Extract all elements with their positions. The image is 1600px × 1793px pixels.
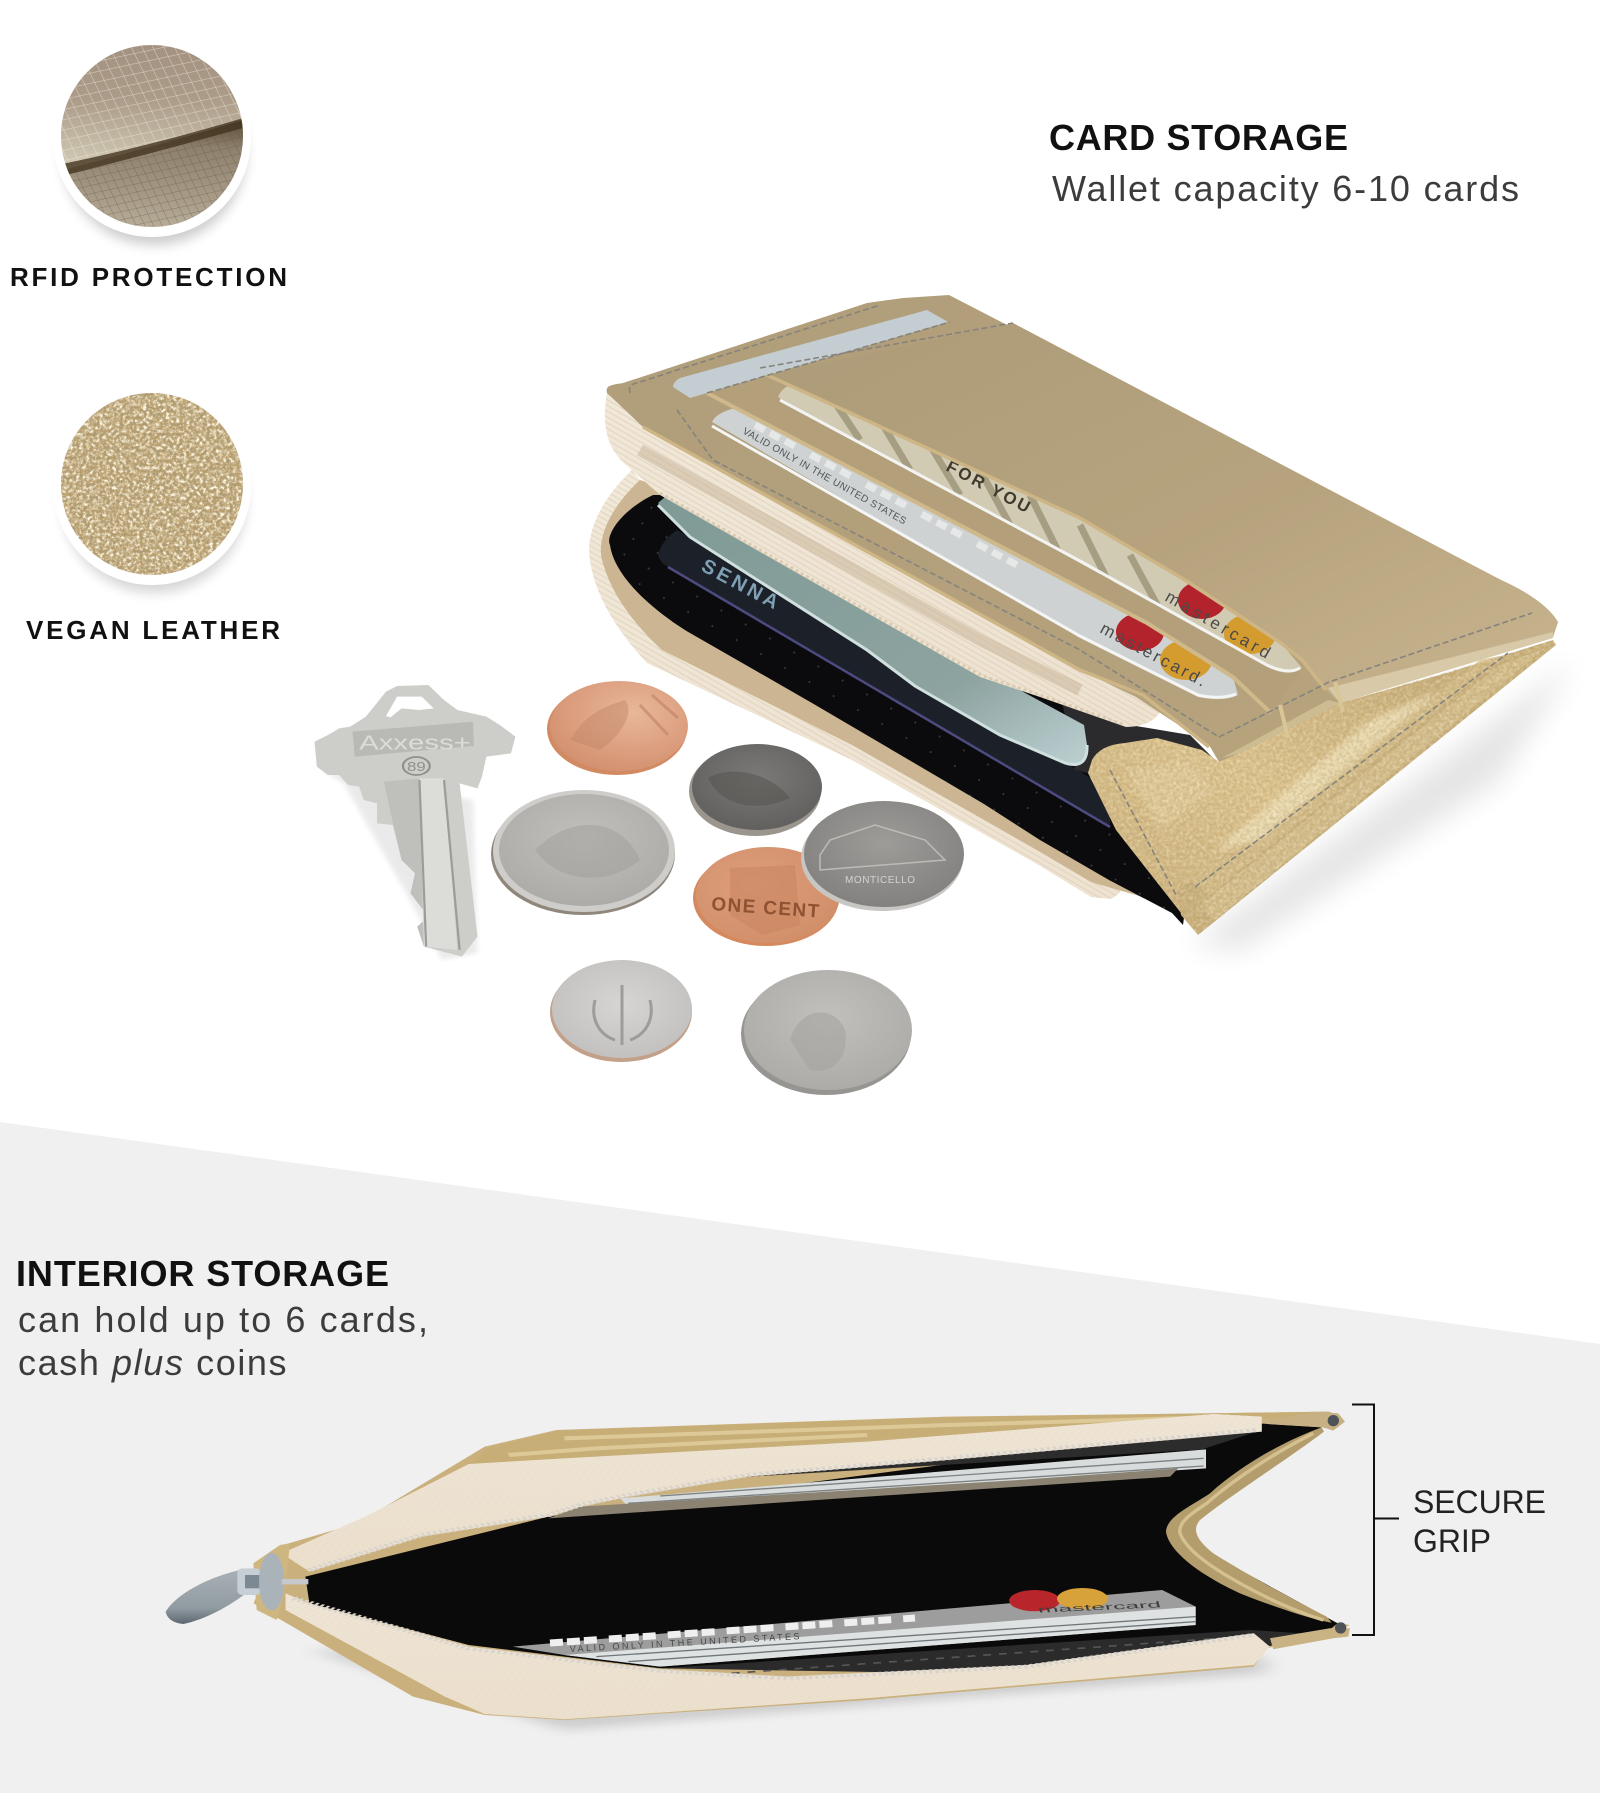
key: Axxess+ bbox=[359, 732, 471, 754]
heading: interior storage: INTERIOR STORAGE bbox=[16, 1253, 389, 1294]
piping lines bbox=[643, 375, 1326, 747]
feature badge: vegan leather bbox=[53, 387, 251, 593]
feature badge: RFID protection bbox=[53, 39, 251, 245]
photo: wallet with cards: SENNA bbox=[698, 555, 782, 614]
photo: wallet with cards bbox=[589, 295, 1575, 950]
teal cards bbox=[658, 497, 1087, 765]
text: interior storage description: cash plus coins bbox=[18, 1342, 288, 1383]
card emboss marks bbox=[550, 1618, 915, 1643]
rear panel bbox=[607, 295, 1558, 762]
coin: nickel right bbox=[801, 801, 964, 911]
coin: dime lower bbox=[550, 960, 692, 1062]
striped card: mastercard bbox=[1162, 587, 1274, 662]
top card bbox=[673, 310, 948, 398]
bracket: secure grip bbox=[1352, 1404, 1399, 1635]
label: vegan leather: VEGAN LEATHER bbox=[26, 615, 280, 645]
outer leather bbox=[254, 1412, 1349, 1720]
lower cards bbox=[513, 1590, 1196, 1667]
zipper pull bbox=[166, 1543, 308, 1624]
key bbox=[315, 685, 515, 960]
dark pocket interior bbox=[1060, 690, 1215, 775]
striped card bbox=[778, 385, 1302, 673]
front pocket panel bbox=[767, 323, 1558, 703]
pocket gusset bbox=[1088, 672, 1450, 913]
coin: penny lower bbox=[693, 847, 840, 946]
key: 89 bbox=[407, 760, 426, 774]
photo: open wallet interior bbox=[166, 1412, 1350, 1730]
silver card bbox=[712, 408, 1238, 699]
photo: wallet with cards: mastercard. bbox=[1097, 619, 1209, 690]
text: wallet capacity: Wallet capacity 6-10 cards bbox=[1052, 168, 1519, 209]
coin: nickel lower bbox=[741, 970, 912, 1095]
coin: dime dark bbox=[689, 744, 822, 836]
label: secure grip: GRIP bbox=[1413, 1523, 1491, 1559]
gold side gusset bbox=[1166, 1412, 1350, 1649]
interior lining bbox=[609, 495, 1200, 925]
lower panel bbox=[660, 1630, 1330, 1673]
lower zipper tape bbox=[589, 470, 1125, 899]
photo: wallet with cards: VALID ONLY IN THE UNITED STATES bbox=[741, 426, 908, 527]
interior lining bbox=[305, 1423, 1338, 1668]
card fine print: VALID ONLY IN THE UNITED STATES bbox=[570, 1631, 800, 1654]
upper zipper tape bbox=[605, 393, 1160, 727]
dark card bbox=[658, 530, 1110, 827]
coin: penny lower: ONE CENT bbox=[711, 894, 820, 923]
gold top strip bbox=[469, 1412, 1328, 1465]
striped card: FOR YOU bbox=[943, 457, 1033, 517]
label: RFID protection: RFID PROTECTION bbox=[10, 262, 287, 292]
coin: nickel right: MONTICELLO bbox=[845, 875, 915, 886]
coin: penny top bbox=[547, 681, 688, 775]
label: secure grip: SECURE bbox=[1413, 1484, 1546, 1520]
photo: open wallet interior: mastercard bbox=[1037, 1600, 1162, 1615]
background band: grey angled panel bbox=[0, 1122, 1600, 1793]
heading: card storage: CARD STORAGE bbox=[1049, 117, 1348, 158]
top cards bbox=[620, 1449, 1206, 1507]
stitching bbox=[629, 305, 1532, 895]
coin: quarter bbox=[491, 790, 675, 915]
middle slot band bbox=[707, 375, 1302, 713]
upper zipper tape bbox=[282, 1414, 1262, 1572]
lower zipper tape bbox=[285, 1593, 1270, 1719]
text: interior storage description: can hold up to 6 cards, bbox=[18, 1299, 428, 1340]
